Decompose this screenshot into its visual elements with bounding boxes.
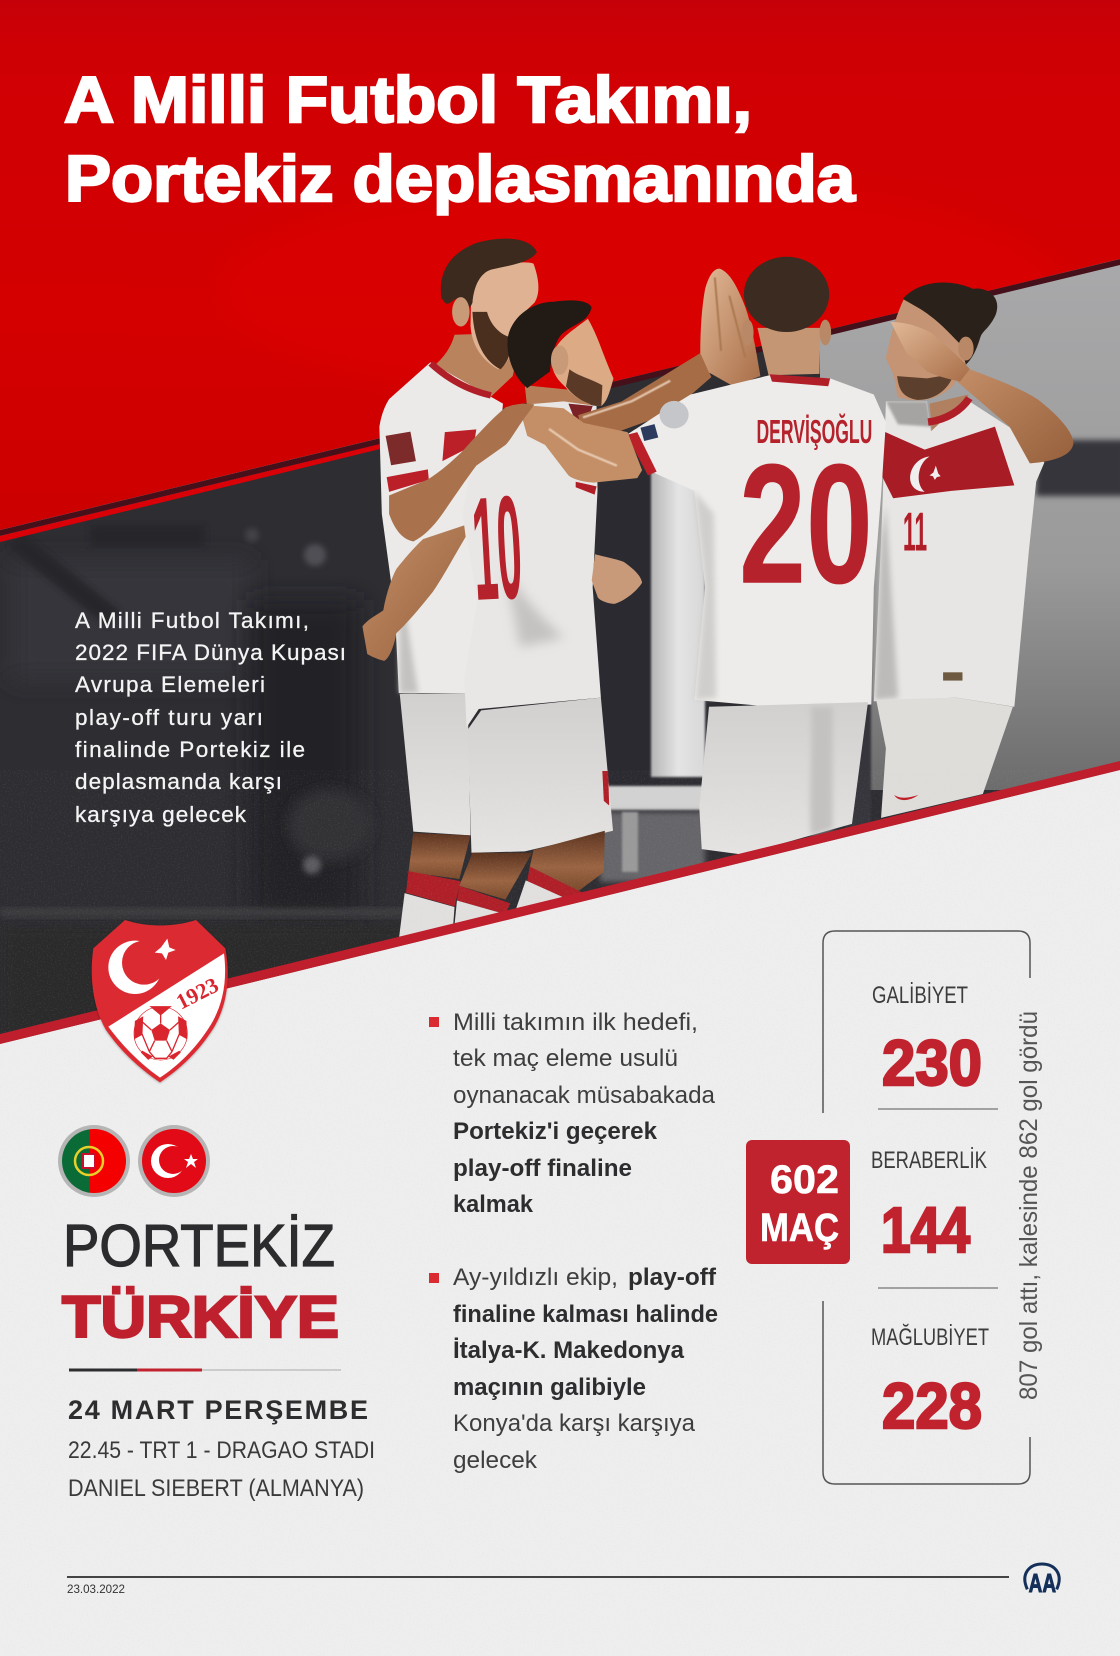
stat: losses: MAĞLUBİYET [871, 1324, 989, 1351]
intro text block: play-off turu yarı [75, 705, 263, 730]
intro text block: karşıya gelecek [75, 802, 247, 827]
text block: second goal: İtalya-K. Makedonya [453, 1337, 685, 1364]
icon: Portugal flag [58, 1125, 130, 1197]
icon: Turkey flag [138, 1125, 210, 1197]
stat: wins [872, 982, 982, 1099]
intro text block [75, 608, 346, 827]
match time and venue: 22.45 - TRT 1 - DRAGAO STADI [68, 1437, 375, 1464]
title [64, 63, 856, 215]
photo: four football players celebrating [362, 239, 1073, 940]
intro text block: finalinde Portekiz ile [75, 737, 305, 762]
stat: losses: 228 [882, 1370, 982, 1442]
intro text block: Avrupa Elemeleri [75, 672, 265, 697]
text block: first goal: oynanacak müsabakada [453, 1082, 716, 1109]
icon: federation shield [92, 920, 228, 1082]
text block: first goal: play-off finaline [453, 1155, 632, 1182]
emblem year: 1923 [172, 972, 223, 1014]
paper grain texture [0, 770, 1120, 1656]
player 11 on the right: 11 [903, 502, 927, 563]
stat: wins: 230 [882, 1027, 982, 1099]
text block: first goal: Milli takımın ilk hedefi, [453, 1009, 698, 1036]
title: A Milli Futbol Takımı, [64, 63, 752, 136]
player 11 on the right [874, 283, 1073, 818]
text block: second goal: play-off [628, 1264, 717, 1291]
jersey number 20: 20 [739, 429, 873, 620]
text block: second goal: finaline kalması halinde [453, 1301, 718, 1328]
player number 10, front left [453, 300, 642, 940]
referee: DANIEL SIEBERT (ALMANYA) [68, 1475, 364, 1502]
player number 20, back view [627, 257, 886, 855]
lower left arm and fist [362, 525, 466, 661]
heading: Türkiye: TÜRKİYE [62, 1285, 339, 1350]
header diagonal dark stripe [0, 259, 1120, 536]
arm reaching across and the arm on the shoulder [389, 404, 642, 541]
panel: red header background [0, 0, 1120, 530]
lower diagonal red stripe [0, 761, 1120, 1044]
text block: first goal [429, 1009, 716, 1218]
badge: total matches: 602 [770, 1158, 839, 1202]
intro text block: A Milli Futbol Takımı, [75, 608, 309, 633]
text block: first goal: Portekiz'i geçerek [453, 1118, 658, 1145]
icon: AA logo [1025, 1564, 1059, 1598]
icon: jersey crescent and star [910, 456, 941, 492]
stat: losses [871, 1324, 989, 1442]
title: Portekiz deplasmanında [65, 142, 856, 215]
vertical goals note: 807 gol attı, kalesinde 862 gol gördü [1015, 1011, 1043, 1400]
player on the left, back row [379, 239, 538, 940]
text block: second goal: Konya'da karşı karşıya [453, 1410, 696, 1437]
stat: draws: BERABERLİK [871, 1147, 987, 1174]
badge: total matches [746, 1140, 850, 1264]
text block: second goal [429, 1264, 718, 1474]
bullet square [429, 1273, 439, 1283]
footer rule [67, 1576, 1009, 1578]
player number 10, front left: 10 [468, 465, 526, 632]
match date: 24 MART PERŞEMBE [68, 1395, 368, 1425]
text block: second goal: Ay-yıldızlı ekip, [453, 1264, 618, 1291]
panel: grayscale photo background [0, 230, 1120, 1050]
stat: wins: GALİBİYET [872, 982, 968, 1009]
intro text block: 2022 FIFA Dünya Kupası [75, 640, 346, 665]
heading: Portekiz: PORTEKİZ [63, 1213, 335, 1279]
high-five arm and hands [578, 269, 760, 434]
intro text block: deplasmanda karşı [75, 769, 282, 794]
text block: second goal: maçının galibiyle [453, 1374, 646, 1401]
panel: lower light section [0, 770, 1120, 1656]
text block: first goal: tek maç eleme usulü [453, 1045, 678, 1072]
jersey name: DERVİŞOĞLU [756, 414, 872, 451]
text block: second goal: gelecek [453, 1447, 538, 1474]
icon: AA logo: AA [1029, 1568, 1056, 1598]
footer date: 23.03.2022 [67, 1582, 125, 1596]
header diagonal red stripe left part [0, 444, 380, 542]
stat: draws [871, 1147, 987, 1266]
stat: draws: 144 [881, 1194, 970, 1266]
badge: total matches: MAÇ [760, 1206, 839, 1250]
divider line [69, 1368, 341, 1372]
bullet square [429, 1017, 439, 1027]
icon: football [134, 1007, 187, 1060]
panel: statistics box outline [823, 931, 1030, 1484]
text block: first goal: kalmak [453, 1191, 534, 1218]
